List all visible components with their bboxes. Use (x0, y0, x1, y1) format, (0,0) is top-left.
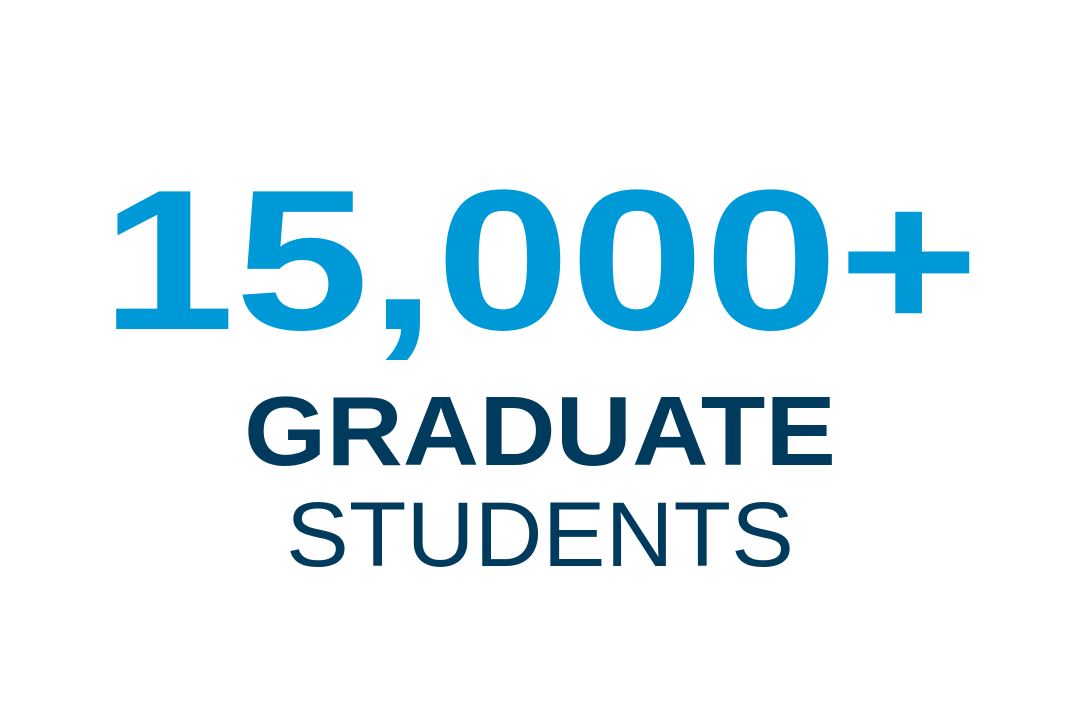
subheading: STUDENTS: STUDENTS (286, 484, 794, 586)
heading: GRADUATE: GRADUATE (244, 376, 836, 486)
big number: 15,000+: 15,000+ (101, 149, 979, 372)
